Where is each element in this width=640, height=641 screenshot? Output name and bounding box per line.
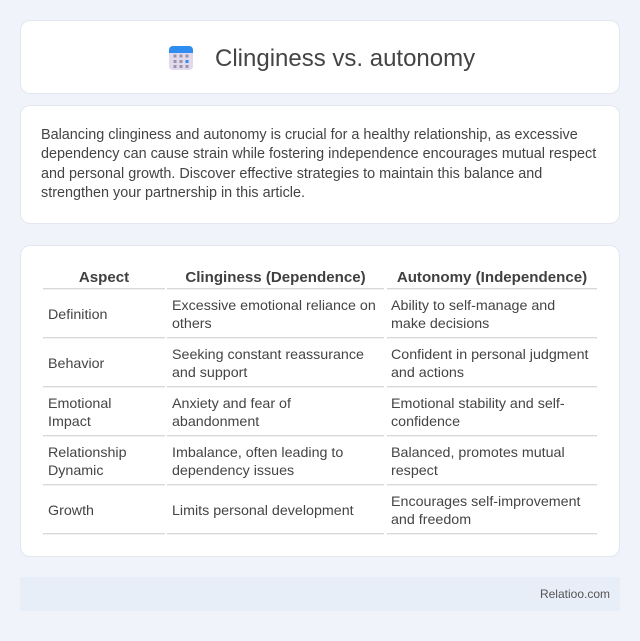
row: emotional impact: Impact xyxy=(48,414,91,430)
row: definition: others xyxy=(172,316,212,332)
row: growth xyxy=(43,494,597,535)
table header row: Autonomy (Independence) xyxy=(397,269,587,286)
row: relationship dynamic: Relationship xyxy=(48,445,127,461)
row: relationship dynamic xyxy=(43,445,597,486)
row: behavior: Confident in personal judgment xyxy=(391,347,588,363)
header card xyxy=(20,20,620,94)
row: behavior: Behavior xyxy=(48,356,104,372)
intro text xyxy=(41,127,596,201)
row: relationship dynamic: Dynamic xyxy=(48,463,104,479)
intro text: Balancing clinginess and autonomy is crucial for a healthy relationship, as excessive xyxy=(41,127,578,143)
title: Clinginess vs. autonomy xyxy=(215,45,475,72)
intro card xyxy=(20,105,620,224)
row: growth: Growth xyxy=(48,503,94,519)
row: relationship dynamic: Balanced, promotes mutual xyxy=(391,445,565,461)
row: definition: Ability to self-manage and xyxy=(391,298,555,314)
comparison table panel xyxy=(20,245,620,557)
row: definition: Definition xyxy=(48,307,107,323)
intro text: dependency can cause strain while fostering independence encourages mutual respect xyxy=(41,146,596,162)
row: emotional impact: Anxiety and fear of xyxy=(172,396,291,412)
intro text: strengthen your partnership in this article. xyxy=(41,185,305,201)
row: emotional impact: abandonment xyxy=(172,414,259,430)
row: behavior: Seeking constant reassurance xyxy=(172,347,364,363)
row: emotional impact: Emotional xyxy=(48,396,111,412)
row: behavior: and support xyxy=(172,365,247,381)
footer credit: Relatioo.com xyxy=(540,587,610,601)
row: definition xyxy=(43,298,597,339)
table header row: Aspect xyxy=(79,269,129,286)
row: emotional impact: confidence xyxy=(391,414,460,430)
row: definition: Excessive emotional reliance on xyxy=(172,298,376,314)
row: growth: Limits personal development xyxy=(172,503,354,519)
row: relationship dynamic: Imbalance, often leading to xyxy=(172,445,343,461)
row: behavior: and actions xyxy=(391,365,464,381)
table header row xyxy=(43,269,597,290)
row: behavior xyxy=(43,347,597,388)
row: relationship dynamic: respect xyxy=(391,463,438,479)
row: definition: make decisions xyxy=(391,316,489,332)
row: relationship dynamic: dependency issues xyxy=(172,463,294,479)
row: growth: and freedom xyxy=(391,512,471,528)
intro text: and personal growth. Discover effective strategies to maintain this balance and xyxy=(41,166,542,182)
table header row: Clinginess (Dependence) xyxy=(185,269,366,286)
row: emotional impact xyxy=(43,396,597,437)
icon: calendar xyxy=(169,46,193,70)
row: emotional impact: Emotional stability and self- xyxy=(391,396,565,412)
footer bar xyxy=(20,577,620,611)
row: growth: Encourages self-improvement xyxy=(391,494,581,510)
